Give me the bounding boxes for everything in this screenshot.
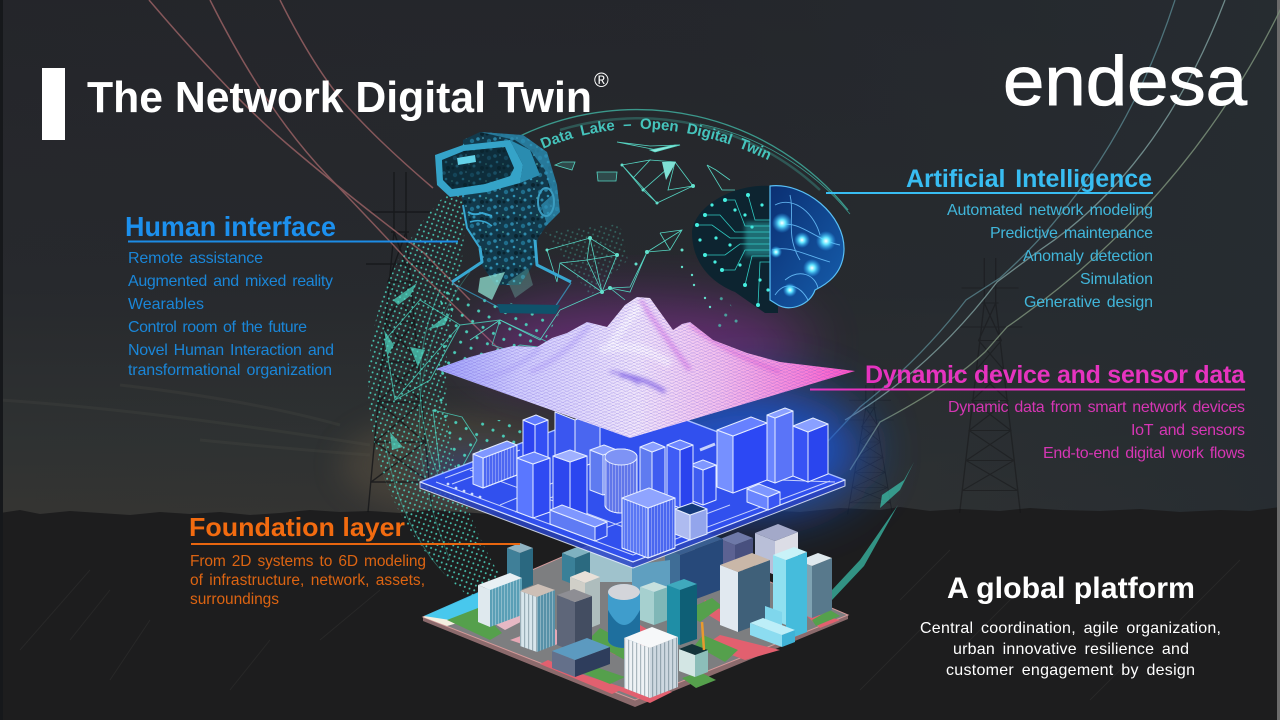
front buildings <box>624 622 708 698</box>
list: foundation layer: of infrastructure, network, assets, <box>190 572 425 589</box>
brain circuit half <box>692 186 778 313</box>
panel: foundation layer <box>189 512 520 608</box>
globe shards lower right <box>832 462 914 600</box>
panel: human interface <box>125 211 458 379</box>
leader line: dynamic data <box>810 388 1245 390</box>
list: human interface: Control room of the future <box>128 319 307 336</box>
transmission towers <box>366 172 1022 514</box>
list: human interface: Remote assistance <box>128 250 263 267</box>
power lines left <box>149 0 500 350</box>
text block: global platform: Central coordination, agile organization, <box>920 620 1221 637</box>
data network polygons <box>470 142 735 340</box>
list: human interface <box>128 250 334 379</box>
heading: foundation layer: Foundation layer <box>189 512 405 542</box>
globe: data lake sphere <box>365 172 745 630</box>
list: foundation layer: surroundings <box>190 591 279 608</box>
heading: a global platform: A global platform <box>947 572 1195 605</box>
list: artificial intelligence: Automated network modeling <box>947 202 1153 219</box>
headset visor <box>435 140 540 197</box>
heading: human interface: Human interface <box>125 211 336 242</box>
layer: blue wireframe digital city <box>420 400 845 568</box>
leader line: foundation layer <box>191 543 520 545</box>
glow behind layers <box>420 300 865 512</box>
title: ® <box>594 70 609 92</box>
icon: AI brain <box>692 186 844 313</box>
layer: terrain mesh <box>430 290 860 440</box>
leader line: human interface <box>128 240 458 242</box>
title bar <box>42 68 65 140</box>
layer: foundation isometric city <box>423 524 848 707</box>
list: dynamic data: End-to-end digital work flows <box>1043 445 1245 462</box>
list: foundation layer <box>190 553 426 608</box>
panel: artificial intelligence <box>826 165 1153 311</box>
mid buildings <box>478 547 832 677</box>
list: artificial intelligence: Generative design <box>1024 294 1153 311</box>
list: human interface: Novel Human Interaction and <box>128 342 334 359</box>
title: The Network Digital Twin <box>87 73 592 122</box>
list: human interface: transformational organization <box>128 362 332 379</box>
list: dynamic data <box>948 399 1245 462</box>
text block: global platform: customer engagement by design <box>946 662 1195 679</box>
power lines right <box>815 0 1280 470</box>
list: artificial intelligence <box>947 202 1153 311</box>
back buildings <box>507 524 798 605</box>
list: artificial intelligence: Simulation <box>1080 271 1153 288</box>
brain lobes half <box>770 186 844 308</box>
list: foundation layer: From 2D systems to 6D modeling <box>190 553 426 570</box>
icon: VR headset human bust <box>435 132 571 314</box>
leader line: artificial intelligence <box>826 192 1153 194</box>
text block: global platform <box>920 620 1221 679</box>
panel: dynamic device and sensor data <box>810 361 1246 462</box>
heading: dynamic data: Dynamic device and sensor data <box>865 361 1246 389</box>
list: artificial intelligence: Anomaly detection <box>1023 248 1153 265</box>
list: artificial intelligence: Predictive maintenance <box>990 225 1153 242</box>
arc label: data lake: Data Lake – Open Digital Twin <box>540 118 770 160</box>
list: human interface: Augmented and mixed reality <box>128 273 333 290</box>
list: dynamic data: Dynamic data from smart network devices <box>948 399 1245 416</box>
globe top arc <box>520 110 850 214</box>
list: dynamic data: IoT and sensors <box>1131 422 1245 439</box>
heading: artificial intelligence: Artificial Intelligence <box>906 165 1152 193</box>
list: human interface: Wearables <box>128 296 204 313</box>
text block: global platform: urban innovative resilience and <box>953 641 1189 658</box>
panel: a global platform <box>920 572 1221 679</box>
logo: endesa: endesa <box>1003 42 1247 120</box>
